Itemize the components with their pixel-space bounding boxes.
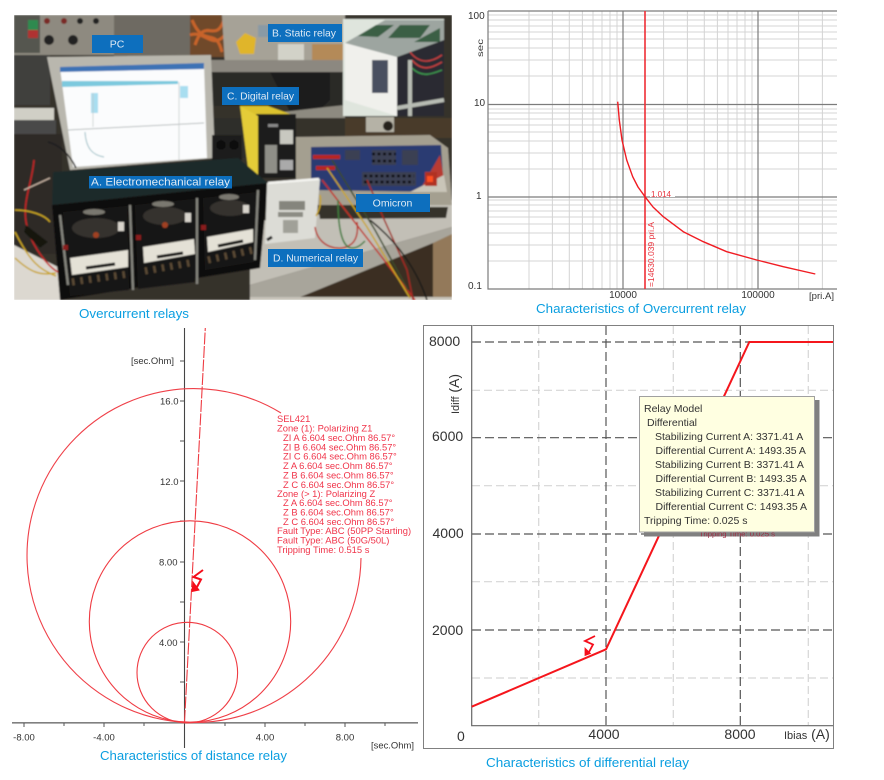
value label: 1.014: 1.014 — [651, 189, 671, 199]
relay settings text: Z A 6.604 sec.Ohm 86.57° — [283, 497, 393, 508]
chart: differential relay characteristic — [424, 325, 834, 748]
relay settings text: Z C 6.604 sec.Ohm 86.57° — [283, 479, 394, 490]
relay settings text: SEL421 — [277, 413, 310, 424]
chart: distance relay characteristic — [12, 328, 418, 752]
value label: current: =14630.039 pri.A — [646, 222, 656, 287]
axis labels: Ibias (A) — [784, 726, 830, 742]
label: PC — [92, 35, 143, 53]
axis labels: 0 — [457, 728, 465, 744]
axis labels: 10000 — [609, 290, 637, 301]
relay settings text: ZI B 6.604 sec.Ohm 86.57° — [283, 442, 396, 452]
icon: fault lightning marker — [194, 570, 203, 587]
axis labels: 6000 — [432, 428, 463, 444]
tooltip: relay model: Differential Current C: 1493.35 A — [656, 501, 807, 513]
relay settings text: Tripping Time: 0.515 s — [277, 544, 370, 555]
axis labels: 0.1 — [468, 281, 482, 292]
axis labels — [429, 333, 830, 744]
axis labels: 100000 — [741, 290, 775, 301]
axis labels: 1 — [476, 191, 482, 202]
axis labels: -8.00 — [13, 732, 35, 744]
caption: overcurrent relays: Overcurrent relays — [79, 306, 190, 321]
relay settings text: Zone (> 1): Polarizing Z — [277, 488, 375, 499]
axis labels: 100 — [468, 11, 485, 22]
caption: differential characteristics: Characteristics of differential relay — [486, 755, 690, 770]
label: B. Static relay — [268, 24, 342, 42]
label: Omicron — [356, 194, 430, 212]
numerical relay — [265, 179, 320, 244]
axis labels: 4000 — [588, 726, 620, 742]
axis labels: 2000 — [432, 622, 463, 638]
relay settings text: Zone (1): Polarizing Z1 — [277, 422, 372, 434]
chart: overcurrent relay characteristic — [468, 11, 837, 302]
relay settings text: ZI C 6.604 sec.Ohm 86.57° — [283, 450, 397, 462]
tooltip: relay model: Differential Current A: 1493.35 A — [656, 445, 806, 457]
label: D. Numerical relay: D. Numerical relay — [273, 252, 359, 264]
axis labels: 8000 — [724, 726, 756, 742]
panel: overcurrent relays photo — [14, 15, 452, 300]
relay settings text: Fault Type: ABC (50PP Starting) — [277, 525, 411, 536]
axis labels: 10 — [474, 98, 486, 109]
relay settings text: Fault Type: ABC (50G/50L) — [277, 534, 389, 546]
tooltip: relay model: Tripping Time: 0.025 s — [699, 530, 775, 538]
zone 3 circle — [27, 389, 361, 723]
dotted frame — [424, 326, 834, 748]
label: C. Digital relay — [222, 87, 299, 105]
label: D. Numerical relay — [268, 249, 363, 267]
axes — [472, 325, 833, 726]
icon: fault lightning marker — [585, 636, 595, 652]
relay settings text: Z A 6.604 sec.Ohm 86.57° — [283, 460, 393, 471]
axis labels: 8.00 — [336, 732, 354, 744]
relay settings text: Z C 6.604 sec.Ohm 86.57° — [283, 516, 394, 527]
zone 2 circle — [89, 521, 291, 722]
axis labels: [sec.Ohm] — [131, 356, 174, 367]
caption: distance characteristics: Characteristics of distance relay — [100, 748, 287, 763]
axis labels — [468, 11, 834, 302]
axis labels: 8.00 — [159, 558, 178, 568]
tooltip: relay model: Stabilizing Current C: 3371.41 A — [655, 487, 804, 499]
axis labels: Idiff (A) — [446, 374, 462, 414]
line angle — [184, 328, 205, 722]
axis labels: 8000 — [429, 333, 460, 349]
relay settings text — [277, 413, 411, 555]
electromechanical relay — [52, 158, 268, 205]
zone 1 circle — [137, 622, 238, 723]
tooltip: relay model: Tripping Time: 0.025 s — [644, 515, 748, 527]
caption: overcurrent characteristics: Characteristics of Overcurrent relay — [536, 301, 747, 316]
axis labels: [pri.A] — [809, 291, 834, 302]
tooltip: relay model: Stabilizing Current B: 3371.41 A — [655, 459, 804, 471]
trip characteristic curve — [472, 342, 833, 707]
current marker line — [644, 11, 646, 289]
tooltip: relay model: Relay Model — [644, 403, 702, 415]
tooltip: relay model: Stabilizing Current A: 3371.41 A — [655, 431, 803, 443]
tooltip: relay model — [640, 396, 820, 538]
axis labels: 12.0 — [160, 477, 178, 488]
axis labels: -4.00 — [93, 732, 115, 744]
label: C. Digital relay: C. Digital relay — [227, 90, 295, 102]
axis labels: [sec.Ohm] — [371, 740, 414, 752]
axis labels: 4.00 — [256, 732, 274, 744]
label: A. Electromechanical relay: A. Electromechanical relay — [91, 176, 231, 188]
axis labels: 4000 — [432, 525, 464, 541]
relay settings text: ZI A 6.604 sec.Ohm 86.57° — [283, 432, 395, 443]
axes — [184, 328, 186, 748]
label: PC: PC — [110, 38, 125, 50]
tooltip: relay model: Differential — [647, 417, 697, 429]
axis labels — [13, 356, 414, 752]
relay settings text: Z B 6.604 sec.Ohm 86.57° — [283, 470, 394, 480]
label: B. Static relay: B. Static relay — [272, 28, 337, 40]
axis labels: 4.00 — [159, 638, 178, 649]
table surface — [250, 200, 452, 285]
tooltip: relay model: Differential Current B: 1493.35 A — [656, 473, 806, 485]
label: Omicron: Omicron — [373, 198, 412, 210]
photo: relay test bench — [14, 15, 452, 300]
inverse-time curve — [618, 102, 815, 274]
axis labels: 16.0 — [160, 396, 178, 408]
axis labels: sec — [475, 38, 485, 57]
relay settings text: Z B 6.604 sec.Ohm 86.57° — [283, 506, 394, 518]
